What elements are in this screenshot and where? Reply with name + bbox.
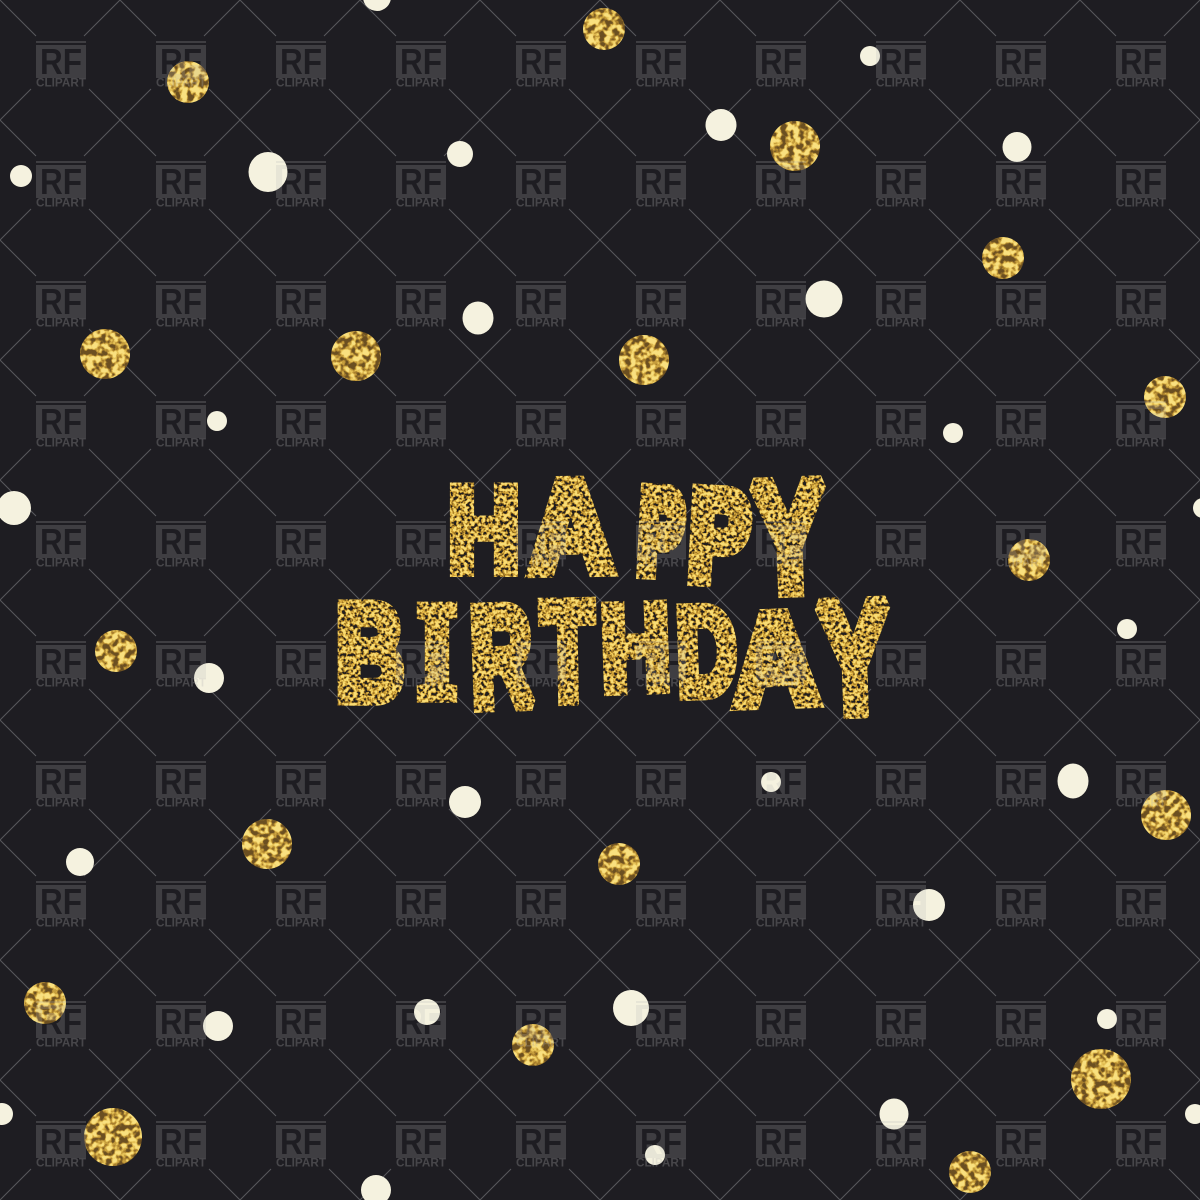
title: Happy Birthday: P [636, 467, 686, 597]
title: Happy Birthday: D [674, 581, 739, 722]
title: Happy Birthday: P [686, 464, 753, 609]
title: Happy Birthday: A [528, 454, 614, 599]
title: Happy Birthday: Y [816, 571, 892, 746]
title: Happy Birthday: B [336, 577, 404, 728]
title: Happy Birthday: R [468, 577, 535, 736]
title: Happy Birthday: T [540, 575, 595, 730]
title: Happy Birthday: H [599, 581, 673, 717]
title: Happy Birthday: Y [751, 451, 828, 625]
title: Happy Birthday: A [731, 586, 820, 732]
title: Happy Birthday: H [448, 463, 520, 597]
title: Happy Birthday: I [418, 578, 456, 726]
title: Happy Birthday [336, 451, 892, 746]
